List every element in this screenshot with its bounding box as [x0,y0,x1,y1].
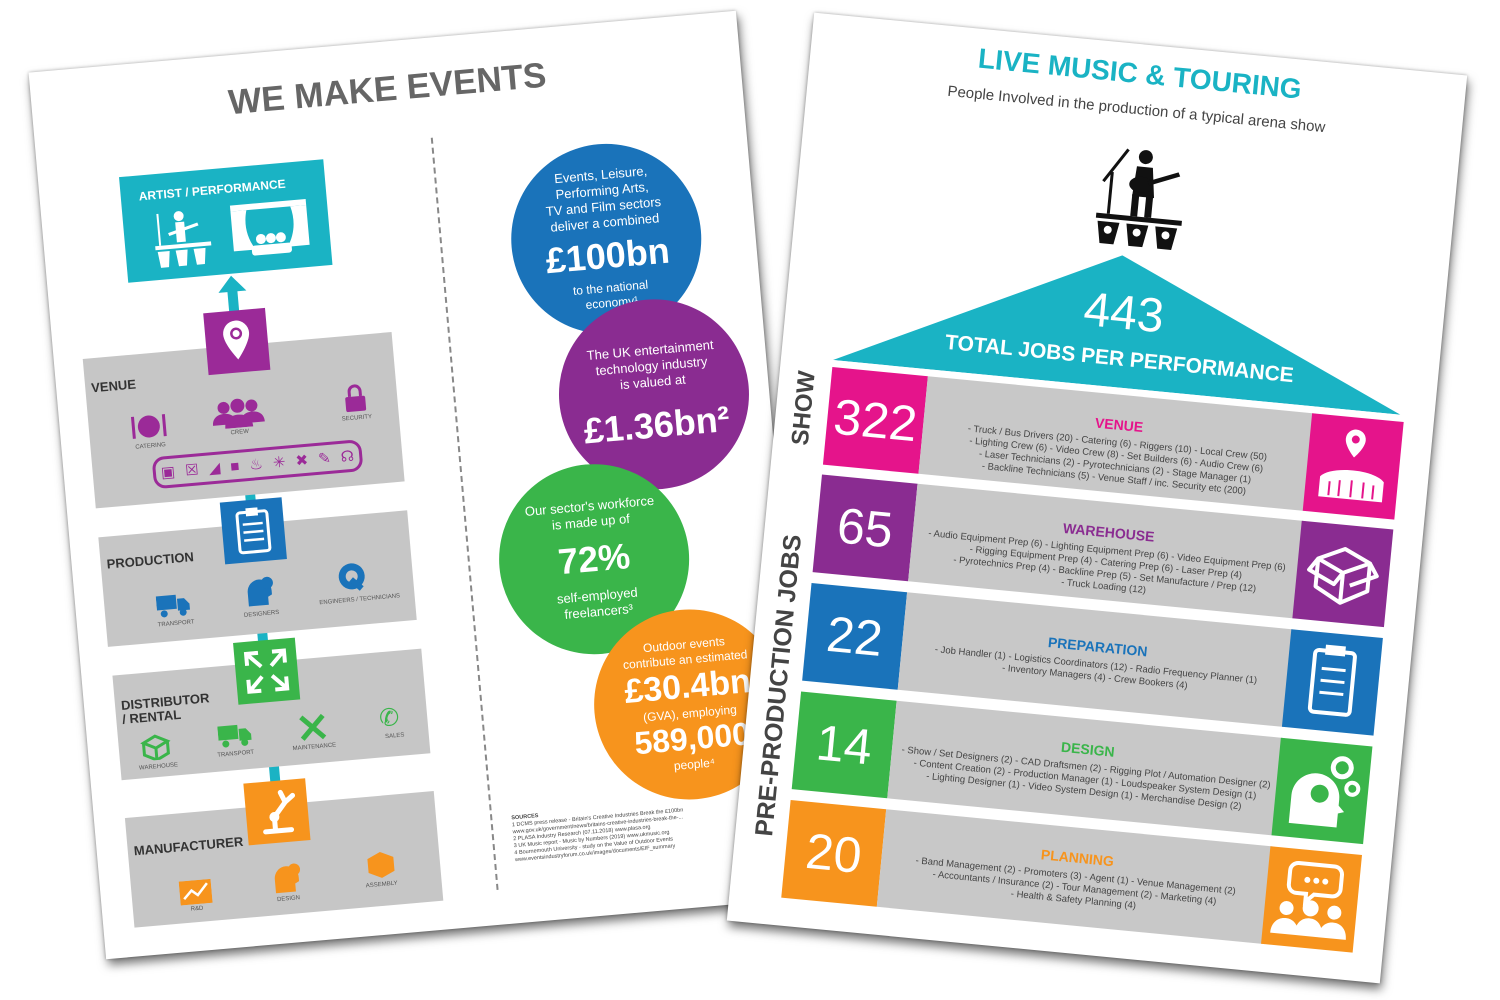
panel: distributor / rental: SALES [385,732,405,740]
icon: catering [131,414,167,439]
panel: production: ENGINEERS / TECHNICIANS [319,593,400,606]
panel: manufacturer: DESIGN [277,895,300,903]
icon row: crew specialisms: ♨ [249,456,264,474]
icon: clipboard [1282,629,1383,736]
row: warehouse: 65 [835,497,895,558]
sources: SOURCES [511,813,539,821]
row: planning: - Band Management (2) - Promoters (3) - Agent (1) - Venue Management (2) [915,855,1236,897]
icon: crew [213,398,265,429]
total number: 443 [1081,283,1166,343]
row: design [792,692,1372,844]
icon: distributor arrows [233,638,300,705]
panel: artist / performance: ARTIST / PERFORMANCE [138,177,286,203]
row: design: - Lighting Designer (1) - Video System Design (1) - Merchandise Design (2) [926,771,1242,812]
side label: show: SHOW [787,370,821,447]
icon row: crew specialisms: ✎ [317,450,331,468]
sources: 4 Bournemouth University - study on the Value of Outdoor Events [514,836,673,856]
stat circle: £30.4bn: £30.4bn [623,662,752,711]
panel: venue: SECURITY [342,414,372,423]
panel: distributor / rental: TRANSPORT [217,750,254,759]
icon: designers [248,576,273,606]
row: warehouse: - Truck Loading (12) [1061,577,1146,596]
panel: artist / performance [119,159,332,283]
row: venue [823,367,1404,520]
icon row: crew specialisms: ☊ [340,448,355,466]
row: planning: 20 [803,823,864,884]
panel: manufacturer: R&D [191,906,204,913]
stat circle: £30.4bn: 589,000 [633,715,751,761]
stat circle: £1.36bn [551,291,757,497]
stat circle: 72%: freelancers³ [564,601,634,622]
subtitle: People Involved in the production of a typical arena show [947,83,1326,136]
icon row: crew specialisms: ▣ [160,463,176,482]
icon: transport [156,594,190,618]
icon: performer and stage [155,199,310,268]
row: warehouse: WAREHOUSE [1062,520,1155,545]
sources: 1 DCMS press release - Britain's Creative Industries Break the £100bn [512,807,684,828]
icon: engineers [338,563,365,591]
panel: venue: CREW [230,429,249,436]
row: warehouse: - Pyrotechnics Prep (4) - Backline Prep (5) - Set Manufacture / Prep (12) [953,555,1257,595]
row: warehouse: - Rigging Equipment Prep (4) - Catering Prep (6) - Laser Prep (4) [969,544,1242,581]
stat circle: £1.36bn: The UK entertainment [586,337,714,363]
row: preparation [802,583,1383,736]
panel: production: DESIGNERS [244,610,280,619]
icon row: crew specialisms: ◢ [208,459,221,477]
row: planning: PLANNING [1040,846,1115,869]
stat circle: 72%: self-employed [556,585,638,607]
stat circle: £100bn: Events, Leisure, [554,163,648,186]
row: venue: - Truck / Bus Drivers (20) - Catering (6) - Riggers (10) - Local Crew (50) [967,423,1267,463]
icon row: crew specialisms [152,439,364,489]
icon: maintenance [299,714,326,741]
panel: manufacturer: ASSEMBLY [366,881,398,889]
stat circle: £30.4bn: Outdoor events [642,634,725,655]
stat circle: £100bn: to the national [572,277,649,298]
stat circle: 72%: 72% [556,535,632,582]
icon row: crew specialisms: ■ [230,457,240,475]
stat circle: 72%: Our sector's workforce [524,493,655,519]
icon: sales: ✆ [378,704,400,732]
row: venue: - Backline Technicians (5) - Venue Staff / inc. Security etc (200) [981,461,1246,497]
icon: performer on stage [1096,148,1182,250]
roof: total jobs [833,255,1400,415]
stat circle: £100bn: economy¹ [585,293,639,312]
connector [233,355,287,854]
panel: production: TRANSPORT [158,619,195,628]
icon: production clipboard [220,497,287,564]
panel: distributor / rental: WAREHOUSE [139,762,178,772]
row: planning: - Health & Safety Planning (4) [1010,889,1136,912]
row: design: 14 [814,714,875,775]
title: LIVE MUSIC & TOURING [977,43,1303,105]
row: venue: VENUE [1094,415,1144,435]
stat circle: £100bn: Performing Arts, [555,179,649,202]
title: WE MAKE EVENTS [227,56,548,122]
icon: arena [1303,413,1404,520]
panel: distributor / rental: / RENTAL [122,707,182,727]
row: design: - Content Creation (2) - Production Manager (1) - Loudspeaker System Design (1) [913,758,1257,802]
panel: production: PRODUCTION [106,549,194,572]
icon: head with gears [1271,738,1372,844]
panel: production [98,510,417,647]
icon: venue pin [203,308,270,375]
row: preparation: 22 [824,606,885,667]
left page: we make events [29,11,813,959]
sources: www.eventsindustryforum.co.uk/images/documents/EIF_summary [515,843,675,863]
row: venue: - Laser Technicians (2) - Pyrotechnicians (2) - Stage Manager (1) [978,449,1252,486]
icon: security [345,384,366,412]
row: preparation: - Job Handler (1) - Logistics Coordinators (12) - Radio Frequency Planner (1) [934,644,1258,686]
row: venue: - Lighting Crew (6) - Video Crew (8) - Set Builders (6) - Audio Crew (6) [969,436,1264,475]
stat circle: £100bn: TV and Film sectors [545,194,662,219]
panel: venue: VENUE [91,376,137,395]
row: warehouse: - Audio Equipment Prep (6) - Lighting Equipment Prep (6) - Video Equipment Prep (6) [928,528,1286,573]
panel: distributor / rental: MAINTENANCE [292,742,336,752]
panel: venue: CATERING [135,442,166,451]
icon: assembly [367,852,394,878]
divider dashed [431,138,499,890]
panel: venue [83,332,405,508]
side label: pre-production jobs: PRE-PRODUCTION JOBS [750,533,807,837]
icon: design [274,864,300,894]
panel: distributor / rental: DISTRIBUTOR [120,690,210,713]
icon: transport [217,724,252,748]
stat circle: £100bn: £100bn [544,230,671,281]
stat circle: £1.36bn: is valued at [619,372,686,392]
icon: box [1292,521,1393,627]
stat circle: £30.4bn: contribute an estimated [622,647,748,672]
row: preparation: - Inventory Managers (4) - Crew Bookers (4) [1002,663,1188,692]
sources [511,807,684,863]
sources: www.gov.uk/government/news/britains-creative-industries-break-the-... [512,814,683,835]
icon row: crew specialisms: ☒ [185,461,199,479]
stat circle: £1.36bn: £1.36bn² [582,398,731,452]
arrow: up [218,276,246,312]
row: venue: 322 [831,389,920,452]
stat circle: £30.4bn: people⁴ [673,755,716,773]
stat circle: £100bn [503,136,709,342]
row: design: - Show / Set Designers (2) - CAD Draftsmen (2) - Rigging Plot / Automation Designer (2) [901,744,1271,791]
icon: R&D [178,879,212,906]
row: warehouse [812,474,1394,628]
stat circle: £30.4bn: (GVA), employing [643,702,737,724]
stat circle: 72%: is made up of [551,511,630,533]
total label: TOTAL JOBS PER PERFORMANCE [944,331,1295,387]
stat circle: £100bn: deliver a combined [550,210,660,235]
sources: 3 UK Music report - Music by Numbers (2019) www.ukmusic.org [514,830,670,849]
icon: meeting [1261,846,1362,953]
row: preparation: PREPARATION [1047,634,1148,660]
stat circle: £1.36bn: technology industry [595,354,708,378]
icon: manufacturer robot arm [243,778,311,845]
panel: distributor / rental [112,649,430,780]
icon row: crew specialisms: ✳ [272,454,286,472]
icon: warehouse [140,734,170,760]
panel: manufacturer: MANUFACTURER [133,834,244,858]
stat circle: 72% [491,456,697,662]
sources: 2 PLASA Industry Research (07.11.2018) www.plasa.org [513,824,651,842]
row: planning [781,800,1362,953]
right page: live music & touring [727,13,1467,983]
row: design: DESIGN [1060,739,1115,760]
icon row: crew specialisms: ✖ [295,452,309,470]
stat circle: £30.4bn [586,602,792,807]
row: planning: - Accountants / Insurance (2) - Tour Management (2) - Marketing (4) [932,869,1217,907]
panel: manufacturer [125,791,443,928]
